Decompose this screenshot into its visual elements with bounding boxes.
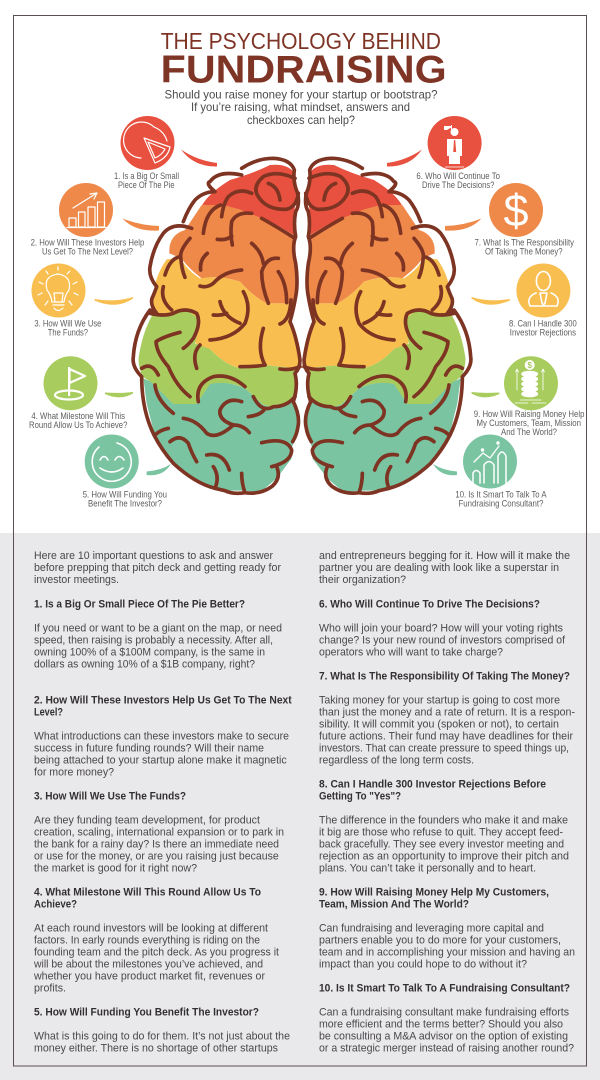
answer 10 [319, 1006, 574, 1054]
icon: pie chart [120, 116, 174, 170]
answer 8: back gracefully. They see every investor meeting and [319, 838, 564, 850]
answer 1: speed, then raising is probably a necessity. After all, [34, 634, 273, 646]
circle labels: Investor Rejections [510, 328, 576, 338]
answer 4: founding team and the pitch deck. As you progress it [34, 946, 279, 958]
panel: right text column [319, 550, 575, 1054]
answer 2: success in future funding rounds? Will their name [34, 742, 264, 754]
icon: growth bars [59, 183, 113, 237]
icon: golf flag [44, 356, 98, 410]
answer 7: investors. That can create pressure to speed things up, [319, 742, 569, 754]
circle labels: 9. How Will Raising Money Help [474, 409, 584, 419]
circle labels: Round Allow Us To Achieve? [29, 420, 127, 430]
answer 2: being attached to your startup alone make it magnetic [34, 754, 287, 766]
circle labels: The Funds? [48, 328, 88, 338]
circle labels: Benefit The Investor? [88, 499, 162, 509]
answer 1: dollars as owning 10% of a $1B company, right? [34, 658, 255, 670]
heading 8: 8. Can I Handle 300 Investor Rejections Before [319, 778, 546, 790]
answer 10: or a strategic merger instead of raising another round? [319, 1042, 574, 1054]
answer 5 continued: their organization? [319, 574, 406, 586]
heading 4: 4. What Milestone Will This Round Allow Us To [34, 886, 262, 898]
brain illustration [133, 158, 471, 493]
circle labels: 5. How Will Funding You [83, 490, 167, 500]
answer 9: impact than you could hope to do without it? [319, 958, 527, 970]
answer 2: for more money? [34, 766, 114, 778]
circle labels: 8. Can I Handle 300 [509, 319, 577, 329]
answer 6: operators who will want to take charge? [319, 646, 503, 658]
icon: person outline [516, 264, 570, 318]
answer 5 continued: partner you are dealing with look like a superstar in [319, 562, 559, 574]
answer 6: Who will join your board? How will your voting rights [319, 622, 563, 634]
answer 5 continued: and entrepreneurs begging for it. How will it make the [319, 550, 570, 562]
circle labels: 2. How Will These Investors Help [31, 238, 144, 248]
circle labels: 4. What Milestone Will This [31, 411, 125, 421]
circle labels: Fundraising Consultant? [458, 499, 543, 509]
answer 2: What introductions can these investors make to secure [34, 730, 289, 742]
answer 10: Can a fundraising consultant make fundraising efforts [319, 1006, 569, 1018]
answer 6: change? Is your new round of investors comprised of [319, 634, 565, 646]
answer 7: future actions. Their fund may have deadlines for their [319, 730, 573, 742]
answer 9: partners enable you to do more for your customers, [319, 934, 561, 946]
answer 4: profits. [34, 982, 66, 994]
title [161, 28, 447, 92]
circle labels: 6. Who Will Continue To [416, 171, 500, 181]
left hemisphere [133, 158, 300, 493]
answer 7 [319, 694, 575, 766]
heading 9: Team, Mission And The World? [319, 898, 469, 910]
answer 9 [319, 922, 575, 970]
answer 4: will be about the milestones you’ve achieved, and [33, 958, 263, 970]
circle labels: 3. How Will We Use [34, 319, 101, 329]
answer 3: Are they funding team development, for product [34, 814, 260, 826]
icon: dollar sign [489, 183, 543, 237]
panel: left text column [33, 550, 292, 1054]
intro text: before prepping that pitch deck and getting ready for [34, 562, 281, 574]
heading 4 [34, 886, 262, 910]
icon: light bulb [32, 264, 86, 318]
icon: person with flag [428, 116, 482, 170]
subtitle [164, 87, 438, 127]
answer 7: than just the money and a rate of return. It is a respon- [319, 706, 575, 718]
answer 4 [33, 922, 279, 994]
heading 6: 6. Who Will Continue To Drive The Decisions? [319, 598, 540, 610]
answer 8 [319, 814, 569, 874]
answer 10: more efficient and the terms better? Should you also [319, 1018, 563, 1030]
icon: smiling face [85, 434, 139, 488]
answer 8: it big are those who refuse to quit. They accept feed- [319, 826, 563, 838]
heading 2: 2. How Will These Investors Help Us Get To The Next [34, 694, 292, 706]
answer 9: team and in accomplishing your mission and having an [319, 946, 575, 958]
title: THE PSYCHOLOGY BEHIND [161, 28, 441, 54]
right hemisphere [304, 158, 471, 493]
circle labels: My Customers, Team, Mission [476, 418, 581, 428]
answer 5 start [34, 1030, 290, 1054]
answer 4: At each round investors will be looking at different [34, 922, 268, 934]
subtitle: checkboxes can help? [247, 113, 355, 127]
answer 1: If you need or want to be a giant on the map, or need [34, 622, 282, 634]
title: FUNDRAISING [161, 49, 447, 92]
answer 8: plans. You can’t take it personally and to heart. [319, 862, 536, 874]
heading 4: Achieve? [34, 898, 77, 910]
circle labels: 7. What Is The Responsibility [475, 238, 574, 248]
answer 10: be consulting a M&A advisor on the option of existing [319, 1030, 568, 1042]
answer 4: factors. In early rounds everything is riding on the [34, 934, 260, 946]
circle labels [29, 171, 584, 509]
circle labels: Of Taking The Money? [485, 247, 563, 257]
answer 3: the market is good for it right now? [34, 862, 197, 874]
answer 2 [34, 730, 289, 778]
answer 3: the bank for a rainy day? Is there an immediate need [34, 838, 279, 850]
answer 1: owning 100% of a $100M company, is the same in [34, 646, 265, 658]
icon: rising chart [463, 434, 517, 488]
heading 9: 9. How Will Raising Money Help My Customers, [319, 886, 549, 898]
circle labels: Us Get To The Next Level? [42, 247, 133, 257]
heading 8 [319, 778, 546, 802]
heading 2 [34, 694, 292, 718]
heading 8: Getting To "Yes"? [319, 790, 401, 802]
subtitle: If you’re raising, what mindset, answers and [191, 100, 410, 114]
circle labels: Piece Of The Pie [118, 180, 174, 190]
heading 7: 7. What Is The Responsibility Of Taking The Money? [319, 670, 570, 682]
icon: coin stack: $ [527, 361, 532, 370]
answer 5 start: What is this going to do for them. It’s not just about the [34, 1030, 290, 1042]
answer 7: Taking money for your startup is going to cost more [319, 694, 560, 706]
subtitle: Should you raise money for your startup or bootstrap? [164, 87, 438, 101]
icon: dollar sign: $ [503, 185, 529, 236]
answer 1 [34, 622, 282, 670]
answer 8: The difference in the founders who make it and make [319, 814, 568, 826]
answer 4: whether you have product market fit, revenues or [33, 970, 265, 982]
answer 3: or use for the money, or are you raising just because [34, 850, 279, 862]
heading 5: 5. How Will Funding You Benefit The Investor? [34, 1006, 259, 1018]
circle labels: And The World? [501, 427, 557, 437]
answer 7: regardless of the long term costs. [319, 754, 474, 766]
connector arcs [94, 150, 510, 475]
answer 5 start: money either. There is no shortage of other startups [34, 1042, 278, 1054]
answer 3: creation, scaling, international expansion or to park in [34, 826, 284, 838]
icon: coin stack [504, 356, 558, 410]
intro text [34, 550, 281, 586]
circle labels: Drive The Decisions? [422, 180, 494, 190]
answer 3 [34, 814, 284, 874]
intro text: investor meetings. [34, 574, 119, 586]
answer 9: Can fundraising and leveraging more capital and [319, 922, 544, 934]
heading 3: 3. How Will We Use The Funds? [34, 790, 186, 802]
heading 2: Level? [34, 706, 63, 718]
circle labels: 10. Is It Smart To Talk To A [455, 490, 546, 500]
heading 10: 10. Is It Smart To Talk To A Fundraising Consultant? [319, 982, 570, 994]
heading 9 [319, 886, 549, 910]
answer 7: sibility. It will commit you (spoken or not), to certain [319, 718, 559, 730]
intro text: Here are 10 important questions to ask and answer [34, 550, 273, 562]
heading 1: 1. Is a Big Or Small Piece Of The Pie Better? [34, 598, 245, 610]
answer 5 continued [319, 550, 570, 586]
circle labels: 1. Is a Big Or Small [114, 171, 179, 181]
answer 8: rejection as an opportunity to improve their pitch and [319, 850, 569, 862]
answer 6 [319, 622, 565, 658]
